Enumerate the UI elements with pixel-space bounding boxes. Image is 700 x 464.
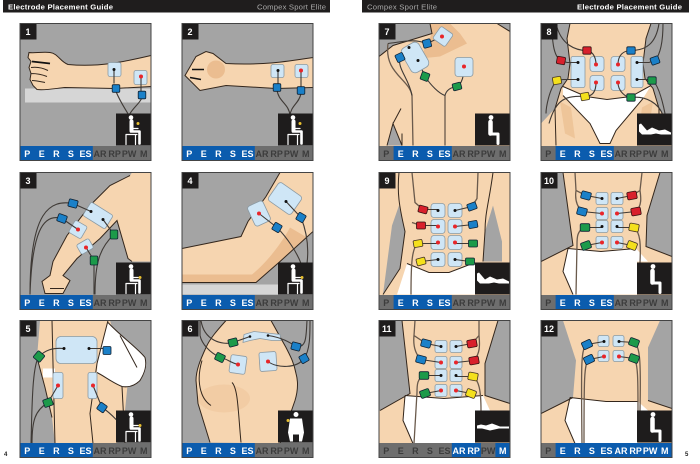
panel number: 11 [382, 324, 392, 334]
mode strip [182, 295, 313, 310]
mode strip: R [412, 446, 419, 456]
pose icon: seated [116, 262, 151, 294]
panel 6: buttock and hip [182, 320, 313, 458]
mode strip [20, 443, 151, 458]
electrode pads and leads [575, 172, 642, 294]
panel 2: forearm, fist facing left [182, 24, 313, 160]
electrode pads and leads [581, 336, 640, 444]
mode strip: S [230, 149, 236, 159]
body illustration [196, 320, 297, 444]
mode strip: PW [643, 298, 658, 308]
body illustration [541, 24, 672, 146]
mode strip: AR [94, 298, 107, 308]
panel 5: front of thigh [20, 320, 151, 458]
mode strip: S [589, 446, 595, 456]
header title: right: Electrode Placement Guide [577, 2, 683, 12]
mode strip: E [560, 298, 566, 308]
mode strip: P [545, 446, 551, 456]
mode strip: AR [452, 298, 466, 308]
panel 7: shoulder and chest [379, 24, 510, 160]
mode strip: S [589, 298, 595, 308]
mode strip: AR [452, 149, 466, 159]
mode strip: PW [122, 149, 137, 159]
thigh illustration [37, 320, 146, 444]
mode strip: ES [600, 446, 613, 456]
mode strip: AR [614, 149, 628, 159]
mode strip [20, 146, 151, 160]
mode strip: PW [481, 446, 496, 456]
panel 1: forearm, fist on bench [20, 24, 151, 160]
mode strip: M [302, 149, 309, 159]
panel 12: upper lower-back, seated [541, 320, 672, 458]
mode strip: E [201, 298, 207, 308]
pose icon: seated [278, 114, 313, 146]
panel number: 9 [384, 176, 390, 186]
panel number: 7 [384, 27, 390, 37]
arm illustration [185, 52, 313, 90]
mode strip: RP [629, 298, 642, 308]
mode strip: R [215, 298, 222, 308]
mode strip: S [427, 298, 433, 308]
mode strip: P [24, 298, 30, 308]
mode strip: R [412, 149, 419, 159]
mode strip: RP [108, 149, 121, 159]
panel number: 10 [544, 176, 554, 186]
mode strip: RP [467, 149, 480, 159]
mode strip: AR [94, 149, 107, 159]
mode strip: S [589, 149, 595, 159]
mode strip: P [545, 149, 551, 159]
electrode pads and leads [31, 336, 118, 444]
mode strip: E [398, 446, 404, 456]
mode strip: AR [256, 298, 269, 308]
mode strip: P [186, 298, 192, 308]
pose icon: reclined [475, 262, 510, 294]
mode strip: E [39, 446, 45, 456]
body illustration [379, 320, 510, 444]
pose icon: reclined [637, 114, 672, 146]
page number: right: 5 [685, 452, 689, 458]
mode strip: E [560, 149, 566, 159]
mode strip: PW [122, 446, 137, 456]
mode strip: R [215, 149, 222, 159]
pose icon: seated [116, 410, 151, 442]
mode strip: M [661, 446, 668, 456]
pose icon: seated, no chair [637, 410, 672, 442]
mode strip [182, 146, 313, 160]
panel number: 2 [188, 27, 193, 37]
mode strip: P [186, 149, 192, 159]
panel number: 6 [188, 324, 193, 334]
mode strip: M [140, 446, 147, 456]
mode strip: E [398, 298, 404, 308]
electrode pads and leads [271, 64, 308, 116]
pose icon: seated, no chair [475, 114, 510, 146]
mode strip: S [230, 446, 236, 456]
electrode pads and leads [108, 62, 147, 116]
mode strip: M [499, 149, 506, 159]
arm illustration [42, 172, 151, 294]
mode strip: P [383, 149, 389, 159]
panel number: 3 [26, 176, 31, 186]
mode strip: M [499, 446, 506, 456]
mode strip: M [140, 149, 147, 159]
mode strip: ES [241, 298, 254, 308]
mode strip: RP [270, 149, 283, 159]
mode strip: RP [108, 298, 121, 308]
mode strip: P [24, 149, 30, 159]
mode strip: PW [481, 298, 496, 308]
mode strip: S [427, 149, 433, 159]
mode strip: RP [467, 446, 480, 456]
mode strip: R [574, 149, 581, 159]
electrode pads and leads [414, 320, 481, 444]
mode strip: AR [256, 149, 269, 159]
mode strip: R [53, 298, 60, 308]
mode strip: S [68, 446, 74, 456]
mode strip: R [53, 446, 60, 456]
header product name: right: Compex Sport Elite [367, 2, 437, 12]
mode strip: P [383, 298, 389, 308]
mode strip [541, 146, 672, 160]
mode strip: M [661, 149, 668, 159]
mode strip: M [140, 298, 147, 308]
pose icon: seated front view [278, 410, 313, 442]
mode strip: PW [122, 298, 137, 308]
page header: right [362, 0, 689, 12]
mode strip: PW [481, 149, 496, 159]
pose icon: seated [116, 114, 151, 146]
mode strip: S [230, 298, 236, 308]
header product name: left: Compex Sport Elite [257, 2, 326, 12]
mode strip: PW [643, 149, 658, 159]
mode strip: S [427, 446, 433, 456]
mode strip: E [398, 149, 404, 159]
panel 11: lower back, prone [379, 320, 510, 458]
mode strip: ES [241, 149, 254, 159]
mode strip: PW [284, 298, 299, 308]
mode strip: E [201, 149, 207, 159]
mode strip [379, 295, 510, 310]
panel number: 12 [544, 324, 554, 334]
mode strip: ES [241, 446, 254, 456]
panel 8: abdomen, lying [541, 24, 672, 160]
mode strip: ES [600, 298, 613, 308]
mode strip: ES [438, 149, 451, 159]
mode strip: RP [629, 446, 642, 456]
mode strip: P [383, 446, 389, 456]
mode strip: E [39, 149, 45, 159]
mode strip: RP [108, 446, 121, 456]
mode strip: RP [467, 298, 480, 308]
mode strip: P [186, 446, 192, 456]
mode strip: RP [629, 149, 642, 159]
pose icon: lying flat [475, 410, 510, 442]
mode strip: E [39, 298, 45, 308]
mode strip: M [302, 446, 309, 456]
mode strip: PW [284, 149, 299, 159]
mode strip: AR [614, 298, 628, 308]
arm illustration [182, 172, 313, 282]
mode strip: AR [614, 446, 628, 456]
mode strip: PW [643, 446, 658, 456]
page header: left [3, 0, 330, 12]
electrode pads and leads [30, 199, 118, 294]
mode strip: ES [79, 446, 92, 456]
mode strip [541, 295, 672, 310]
mode strip: ES [79, 298, 92, 308]
mode strip: RP [270, 298, 283, 308]
header title: left: Electrode Placement Guide [8, 2, 114, 12]
mode strip: ES [438, 298, 451, 308]
panel number: 4 [188, 176, 193, 186]
mode strip: ES [438, 446, 451, 456]
panel number: 5 [26, 324, 31, 334]
mode strip: M [661, 298, 668, 308]
mode strip: S [68, 298, 74, 308]
body illustration [541, 320, 672, 444]
page number: left: 4 [4, 452, 8, 458]
mode strip: P [24, 446, 30, 456]
panel 3: upper arm raised [20, 172, 151, 310]
mode strip: M [302, 298, 309, 308]
panel number: 1 [26, 27, 31, 37]
mode strip: AR [256, 446, 269, 456]
mode strip: R [574, 446, 581, 456]
mode strip: PW [284, 446, 299, 456]
body illustration [541, 172, 672, 294]
electrode pads and leads [546, 24, 665, 124]
mode strip: E [560, 446, 566, 456]
electrode pads and leads [247, 181, 308, 264]
mode strip: AR [94, 446, 107, 456]
body illustration [379, 24, 510, 146]
mode strip: R [574, 298, 581, 308]
panel 4: bent elbow on bench [182, 172, 313, 310]
pose icon: seated [278, 262, 313, 294]
panel 10: lower back, seated [541, 172, 672, 310]
arm illustration [28, 52, 151, 90]
mode strip [20, 295, 151, 310]
pose icon: seated, no chair [637, 262, 672, 294]
mode strip: R [53, 149, 60, 159]
body illustration [383, 172, 502, 294]
mode strip: P [545, 298, 551, 308]
mode strip [182, 443, 313, 458]
mode strip: RP [270, 446, 283, 456]
electrode pads and leads [200, 320, 310, 375]
mode strip: ES [79, 149, 92, 159]
mode strip: AR [452, 446, 466, 456]
panel 9: lower abdomen, lying [379, 172, 510, 310]
mode strip: S [68, 149, 74, 159]
mode strip: E [201, 446, 207, 456]
electrode pads and leads [388, 26, 473, 146]
mode strip [541, 443, 672, 458]
mode strip [379, 146, 510, 160]
mode strip: R [215, 446, 222, 456]
mode strip: R [412, 298, 419, 308]
mode strip: M [499, 298, 506, 308]
mode strip [379, 443, 510, 458]
electrode pads and leads [411, 172, 478, 294]
mode strip: ES [600, 149, 613, 159]
panel number: 8 [546, 27, 552, 37]
